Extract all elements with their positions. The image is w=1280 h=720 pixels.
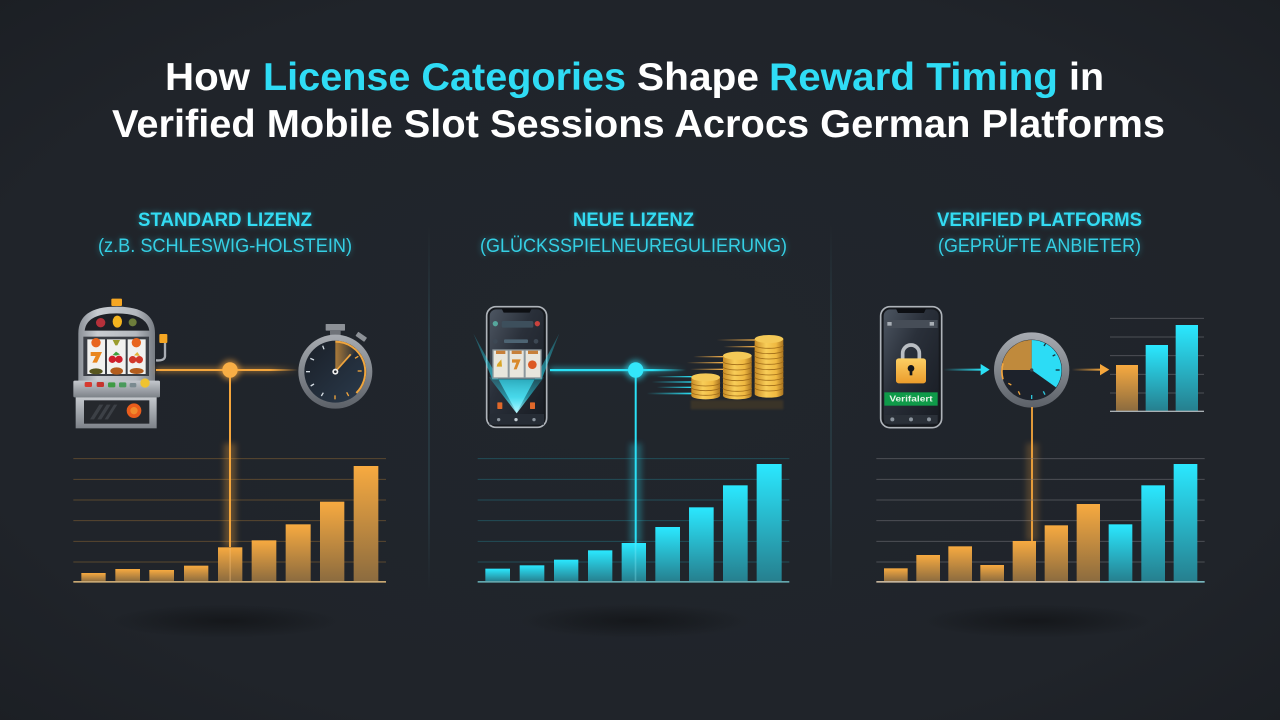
connector: phone to coins — [550, 360, 686, 543]
arrow: phone to timer — [943, 364, 990, 375]
panel: standard lizenz — [73, 210, 386, 638]
panel heading: standard lizenz: (z.B. SCHLESWIG-HOLSTEIN) — [98, 236, 352, 257]
panel heading: verified platforms — [937, 210, 1142, 257]
ground shadow — [520, 604, 750, 638]
icon: slot machine — [73, 299, 167, 428]
mini bar chart — [1110, 318, 1204, 412]
title: License Categories — [263, 56, 626, 99]
icon: phone with padlock: Verifalert — [889, 394, 933, 404]
title: Shape — [637, 56, 759, 99]
panel heading: neue lizenz — [480, 210, 787, 257]
panel heading: standard lizenz: STANDARD LIZENZ — [138, 210, 312, 231]
title: Verified Mobile Slot Sessions Acrocs German Platforms — [112, 103, 1165, 146]
panel heading: standard lizenz: (z.B. SCHLESWIG-HOLSTEIN) — [98, 236, 352, 257]
connector: timer to bar chart — [1031, 407, 1033, 541]
panel heading: verified platforms: VERIFIED PLATFORMS — [937, 210, 1142, 231]
bar chart: verified platforms — [876, 443, 1205, 583]
panel heading: standard lizenz — [98, 210, 352, 257]
title: How — [165, 56, 251, 99]
panel heading: neue lizenz: (GLÜCKSSPIELNEUREGULIERUNG) — [480, 236, 787, 257]
panel heading: standard lizenz: STANDARD LIZENZ — [138, 210, 312, 231]
icon: timer dial — [994, 332, 1069, 408]
panel heading: verified platforms: (GEPRÜFTE ANBIETER) — [938, 236, 1141, 257]
arrow: timer to mini chart — [1072, 364, 1109, 375]
panel heading: neue lizenz: NEUE LIZENZ — [573, 210, 694, 231]
panel heading: verified platforms: VERIFIED PLATFORMS — [937, 210, 1142, 231]
icon: rising coin stacks — [647, 335, 783, 409]
title: in — [1069, 56, 1104, 99]
bar chart: standard lizenz — [73, 443, 386, 583]
divider right — [830, 225, 832, 590]
icon: phone with padlock — [881, 307, 942, 428]
panel: neue lizenz — [473, 210, 789, 638]
icon: phone with slot reels — [473, 307, 559, 427]
ground shadow — [112, 604, 342, 638]
bar chart: neue lizenz — [478, 443, 789, 583]
icon: stopwatch — [298, 324, 372, 409]
divider left — [428, 225, 430, 590]
panel heading: verified platforms: (GEPRÜFTE ANBIETER) — [938, 236, 1141, 257]
panel heading: neue lizenz: NEUE LIZENZ — [573, 210, 694, 231]
connector: slot machine to stopwatch — [156, 360, 298, 547]
title — [112, 56, 1165, 146]
panel: verified platforms — [876, 210, 1205, 638]
ground shadow — [921, 604, 1151, 638]
title: Reward Timing — [769, 56, 1058, 99]
panel heading: neue lizenz: (GLÜCKSSPIELNEUREGULIERUNG) — [480, 236, 787, 257]
